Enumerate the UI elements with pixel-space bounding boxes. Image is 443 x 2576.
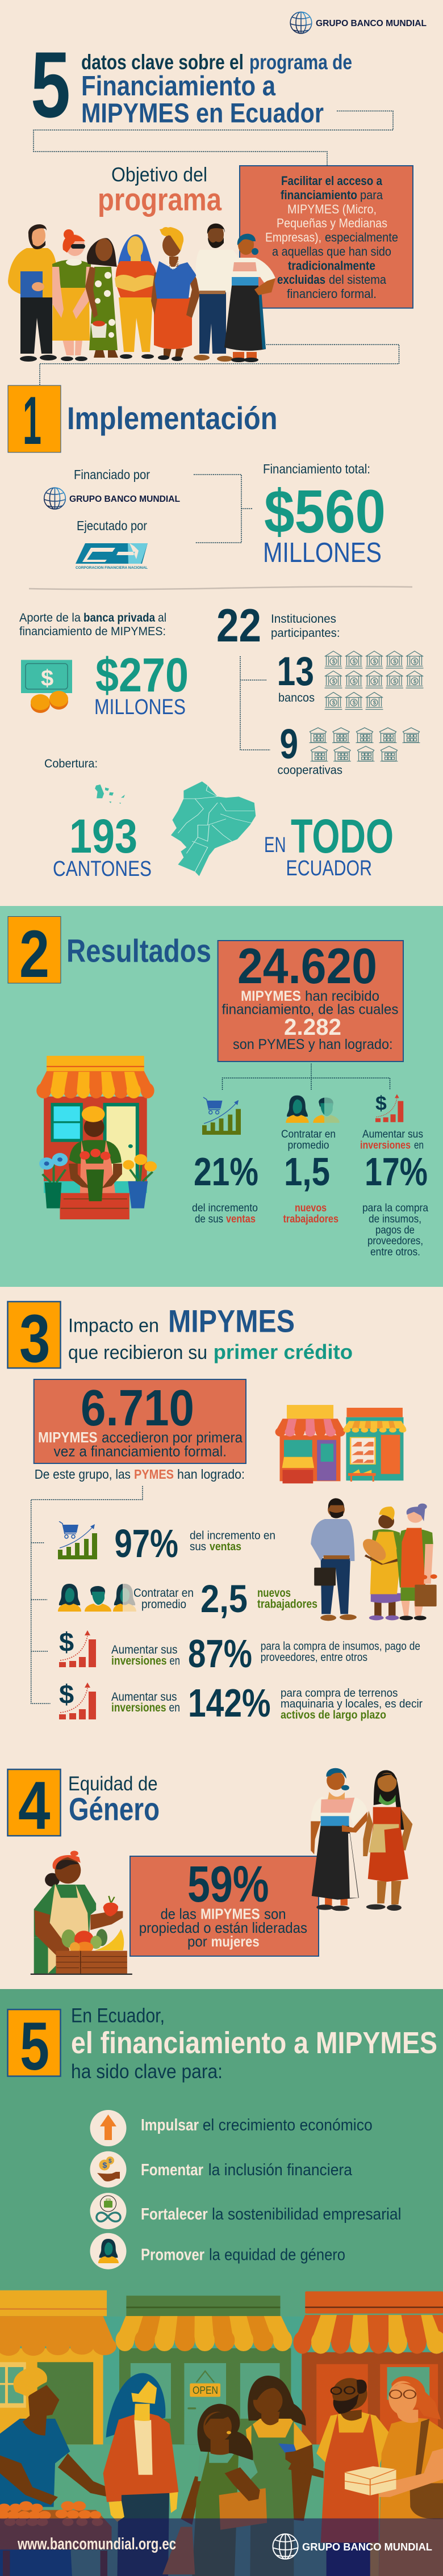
- callout: 24.620 mipymes: 2.282: [284, 1014, 341, 1040]
- stat: 13 bancos: bancos: [278, 691, 315, 704]
- panel: objetivo text box: tradicionalmente: [288, 258, 375, 272]
- heading: equidad de género: [68, 1773, 160, 1828]
- table of oranges: [0, 2501, 112, 2576]
- stat: financiamiento total: MILLONES: [263, 538, 382, 568]
- callout: 59 por ciento mujeres: 59%: [187, 1856, 269, 1913]
- person: woman blue dress: [0, 2367, 114, 2576]
- heading: impacto en mipymes: MIPYMES: [168, 1303, 295, 1339]
- item: promover: Promover: [141, 2246, 204, 2264]
- stat: 17 por ciento inversiones: inversiones: [360, 1140, 411, 1152]
- person: man apron: [288, 2378, 390, 2576]
- stat: 87 por ciento inversiones: proveedores, entre otros: [261, 1651, 367, 1664]
- item: impulsar: Impulsar: [141, 2116, 199, 2134]
- text: aporte banca privada: [19, 611, 166, 638]
- footer band: www.bancomundial.org.ec: [17, 2535, 176, 2553]
- callout: 6.710 mipymes: vez a financiamiento formal.: [53, 1443, 227, 1460]
- panel: objetivo text box: financiero formal.: [287, 287, 377, 301]
- stat: 2,5 nuevos trabajadores: 2,5: [200, 1577, 248, 1621]
- person 5: woman yellow turban: [151, 227, 202, 361]
- stat: 22 instituciones: Instituciones: [271, 612, 336, 626]
- stat: 193 cantones: 193: [69, 809, 137, 863]
- heading: resultados: Resultados: [66, 933, 211, 970]
- ejecutado por CFN: [76, 518, 148, 570]
- panel: objetivo text box: especialmente: [325, 230, 398, 245]
- illustration: group of seven people: [8, 224, 275, 362]
- heading: equidad de género: Equidad de: [68, 1773, 158, 1795]
- panel: objetivo text box: para: [360, 188, 383, 202]
- callout: 59 por ciento mujeres: por: [187, 1933, 207, 1950]
- stat: 142 por ciento inversiones: inversiones: [111, 1701, 166, 1714]
- stat: 142 por ciento inversiones: para compra de terrenos: [281, 1687, 398, 1700]
- section 3 number: 3: [19, 1300, 50, 1377]
- stat: 87 por ciento inversiones: inversiones: [111, 1655, 167, 1668]
- person 6: man white shirt: [194, 224, 239, 362]
- title: datos clave sobre el: [81, 51, 244, 74]
- heading: equidad de género: Género: [69, 1792, 160, 1828]
- panel: objetivo text box: MIPYMES (Micro,: [287, 202, 377, 216]
- illustration: three entrepreneurs: [311, 1498, 437, 1621]
- stat: 17 por ciento inversiones: Aumentar sus: [362, 1128, 423, 1140]
- item: fortalecer: [90, 2193, 401, 2229]
- person 2: woman red hair: [52, 229, 93, 361]
- panel: objetivo text box: financiamiento: [281, 188, 357, 202]
- title: programa de: [249, 51, 352, 74]
- stat: 142 por ciento inversiones: en: [169, 1701, 180, 1714]
- text: aporte banca privada: Aporte de la: [19, 611, 81, 624]
- illustration: market street with shops and people: [0, 2290, 443, 2576]
- stat: financiamiento total: [263, 462, 386, 568]
- stat: 87 por ciento inversiones: [59, 1627, 420, 1676]
- stat: 17 por ciento inversiones: de insumos,: [369, 1214, 421, 1225]
- panel: resultados: [0, 906, 443, 1287]
- stat: en todo Ecuador: EN: [264, 833, 286, 857]
- illustration: two women in traditional dress: [311, 1768, 412, 1911]
- stat: 21 por ciento ventas: [192, 1097, 258, 1225]
- stat: 2,5 nuevos trabajadores: [58, 1577, 317, 1621]
- stat: 17 por ciento inversiones: entre otros.: [370, 1247, 420, 1258]
- callout: 59 por ciento mujeres: mujeres: [211, 1933, 260, 1950]
- stat: en todo Ecuador: [264, 809, 394, 880]
- heading: objetivo del programa: programa: [98, 182, 222, 217]
- panel: objetivo text box: [240, 166, 413, 308]
- stat: 87 por ciento inversiones: Aumentar sus: [111, 1643, 177, 1656]
- callout: 59 por ciento mujeres: de las: [161, 1906, 197, 1923]
- section 1 number: 1: [23, 383, 41, 459]
- label: cobertura: Cobertura:: [44, 757, 98, 770]
- stat: 142 por ciento inversiones: activos de largo plazo: [281, 1709, 386, 1722]
- text: aporte banca privada: banca privada: [83, 611, 155, 624]
- person 4: woman blue hair: [115, 234, 157, 359]
- item: fomentar: $: [108, 2158, 112, 2164]
- callout: 6.710 mipymes: [34, 1379, 246, 1463]
- stat: en todo Ecuador: ECUADOR: [286, 857, 372, 880]
- heading: en Ecuador el financiamiento: [71, 2005, 437, 2083]
- stat: 17 por ciento inversiones: 17%: [365, 1149, 428, 1194]
- stat: 1,5 nuevos trabajadores: nuevos: [295, 1202, 327, 1214]
- stat: 2,5 nuevos trabajadores: trabajadores: [257, 1598, 317, 1611]
- panel: objetivo text box: Empresas),: [265, 230, 321, 245]
- item: fortalecer: Fortalecer: [141, 2205, 208, 2223]
- section 5 number: 5: [20, 2008, 49, 2084]
- shop: orange: [293, 2291, 443, 2444]
- illustration: florist at store: [36, 1056, 157, 1219]
- text: de este grupo: PYMES: [134, 1467, 174, 1482]
- stat: 21 por ciento ventas: ventas: [226, 1214, 256, 1225]
- stat: 270 millones: $270: [95, 648, 189, 702]
- stat: 193 cantones: [53, 809, 152, 881]
- callout: 6.710 mipymes: MIPYMES: [38, 1429, 98, 1446]
- text: de este grupo: [35, 1467, 245, 1482]
- stat: 17 por ciento inversiones: [360, 1092, 428, 1258]
- stat: 13 bancos: [277, 649, 424, 710]
- heading: impacto en mipymes: primer crédito: [214, 1340, 353, 1363]
- title: [31, 32, 352, 137]
- logo: Grupo Banco Mundial header: GRUPO BANCO MUNDIAL: [316, 19, 427, 28]
- stat: 9 cooperativas: [277, 720, 420, 777]
- item: promover: la equidad de género: [209, 2246, 345, 2264]
- stat: 270 millones: MILLONES: [94, 695, 186, 719]
- person 7: woman traditional dress: [223, 234, 275, 362]
- stat: 9 cooperativas: cooperativas: [277, 764, 342, 777]
- stat: 97 por ciento ventas: ventas: [210, 1541, 241, 1553]
- stat: 97 por ciento ventas: del incremento en: [190, 1530, 275, 1542]
- callout: 24.620 mipymes: son PYMES y han logrado:: [233, 1037, 393, 1052]
- callout: 24.620 mipymes: MIPYMES: [241, 988, 301, 1004]
- stat: 22 instituciones: [216, 599, 340, 652]
- stat: 1,5 nuevos trabajadores: [281, 1094, 340, 1225]
- callout: 24.620 mipymes: han recibido: [305, 988, 379, 1004]
- financiado por: Financiado por: [74, 467, 150, 482]
- callout: 59 por ciento mujeres: son: [264, 1906, 286, 1923]
- shop: yellow: [0, 2290, 116, 2444]
- text: aporte banca privada: al: [158, 611, 166, 624]
- item: fomentar: la inclusión financiera: [208, 2161, 353, 2179]
- text: aporte banca privada: financiamiento de MIPYMES:: [19, 625, 166, 638]
- stat: 1,5 nuevos trabajadores: Contratar en: [281, 1128, 336, 1140]
- panel: conclusión: [0, 1989, 443, 2576]
- stat: 2,5 nuevos trabajadores: Contratar en: [133, 1587, 194, 1600]
- text: de este grupo: han logrado:: [177, 1467, 245, 1482]
- panel: objetivo text box: excluidas: [277, 272, 325, 287]
- stat: 17 por ciento inversiones: para la compra: [362, 1202, 428, 1214]
- heading: impacto en mipymes: Impacto en: [68, 1315, 159, 1337]
- stat: 193 cantones: CANTONES: [53, 857, 152, 881]
- item: fomentar: $: [102, 2160, 107, 2170]
- item: fomentar: [90, 2151, 353, 2188]
- callout: 24.620 mipymes: financiamiento, de las cuales: [222, 1002, 399, 1018]
- callout: 6.710 mipymes: accedieron por primera: [102, 1429, 243, 1446]
- stat: en todo Ecuador: TODO: [291, 809, 394, 863]
- section 4 number: 4: [18, 1768, 51, 1844]
- item: impulsar: el crecimiento económico: [203, 2116, 373, 2134]
- title: 5: [31, 32, 70, 137]
- stat: 97 por ciento ventas: 97%: [115, 1521, 178, 1566]
- financiado por: [44, 467, 180, 509]
- heading: implementación: Implementación: [67, 400, 277, 436]
- stat: 97 por ciento ventas: [58, 1521, 275, 1566]
- stat: 21 por ciento ventas: 21%: [194, 1149, 258, 1194]
- stat: 22 instituciones: 22: [216, 599, 261, 652]
- callout: 24.620 mipymes: 24.620: [237, 938, 377, 994]
- stat: 142 por ciento inversiones: 142%: [188, 1681, 271, 1725]
- callout: 59 por ciento mujeres: MIPYMES: [200, 1906, 260, 1923]
- heading: impacto en mipymes: que recibieron su: [68, 1342, 207, 1363]
- stat: 17 por ciento inversiones: proveedores,: [367, 1235, 423, 1247]
- person: woman yellow dress: [345, 2376, 443, 2576]
- text: de este grupo: De este grupo, las: [35, 1467, 131, 1482]
- stat: 2,5 nuevos trabajadores: promedio: [141, 1598, 186, 1611]
- stat: 142 por ciento inversiones: [59, 1679, 423, 1725]
- item: impulsar: [90, 2110, 373, 2146]
- stat: 13 bancos: 13: [277, 649, 314, 694]
- stat: 1,5 nuevos trabajadores: promedio: [287, 1140, 329, 1152]
- callout: 59 por ciento mujeres: [130, 1856, 319, 1956]
- heading: objetivo del programa: Objetivo del: [111, 163, 207, 186]
- callout: 24.620 mipymes: [218, 938, 403, 1062]
- panel: objetivo text box: Facilitar el acceso a: [281, 174, 383, 188]
- icon: billete y monedas: [21, 660, 72, 713]
- sign: open: OPEN: [193, 2385, 218, 2396]
- ejecutado por CFN: Ejecutado por: [77, 518, 147, 533]
- stat: 270 millones: [94, 648, 189, 719]
- callout: 6.710 mipymes: 6.710: [81, 1380, 194, 1437]
- stat: 21 por ciento ventas: del incremento: [192, 1202, 258, 1214]
- map: Ecuador: [95, 782, 256, 876]
- title: Financiamiento a: [81, 71, 276, 102]
- person: woman apron yellow shirt: [246, 2376, 314, 2576]
- panel: objetivo text box: del sistema: [329, 272, 387, 287]
- heading: impacto en mipymes: [68, 1303, 353, 1363]
- stat: 142 por ciento inversiones: maquinaria y locales, es decir: [281, 1698, 423, 1710]
- logo: Grupo Banco Mundial header: [290, 12, 427, 33]
- stat: financiamiento total: $560: [264, 477, 386, 546]
- item: promover: [90, 2233, 345, 2269]
- title: MIPYMES en Ecuador: [81, 99, 324, 128]
- stat: 22 instituciones: participantes:: [271, 627, 340, 640]
- item: fortalecer: la sostenibilidad empresarial: [212, 2205, 401, 2223]
- heading: en Ecuador el financiamiento: ha sido clave para:: [71, 2061, 223, 2083]
- stat: 87 por ciento inversiones: 87%: [188, 1631, 252, 1676]
- ejecutado por CFN: CORPORACION FINANCIERA NACIONAL: [76, 566, 148, 570]
- footer band: GRUPO BANCO MUNDIAL: [302, 2541, 432, 2553]
- stat: 1,5 nuevos trabajadores: trabajadores: [283, 1214, 338, 1225]
- illustration: two shops: [275, 1405, 406, 1483]
- person 1: man yellow shirt: [8, 224, 57, 362]
- stat: 1,5 nuevos trabajadores: 1,5: [284, 1149, 330, 1194]
- heading: objetivo del programa: [98, 163, 222, 217]
- shop: green: [115, 2296, 292, 2444]
- stat: 17 por ciento inversiones: en: [414, 1140, 424, 1152]
- stat: 21 por ciento ventas: de sus: [195, 1214, 223, 1225]
- stat: 142 por ciento inversiones: Aumentar sus: [111, 1690, 177, 1704]
- footer band: [0, 2518, 443, 2576]
- section 2 number: 2: [19, 917, 49, 992]
- stat: 2,5 nuevos trabajadores: nuevos: [257, 1587, 291, 1600]
- illustration: woman with fruit crate: [31, 1851, 132, 1975]
- stat: financiamiento total: Financiamiento total:: [263, 462, 370, 476]
- stat: 97 por ciento ventas: sus: [190, 1541, 206, 1553]
- person: girl with bag: [162, 2404, 267, 2576]
- stat: 17 por ciento inversiones: pagos de: [375, 1224, 415, 1236]
- stat: 87 por ciento inversiones: en: [169, 1655, 180, 1668]
- icon: billete y monedas: $: [41, 666, 53, 691]
- heading: en Ecuador el financiamiento: En Ecuador,: [71, 2005, 165, 2027]
- financiado por: GRUPO BANCO MUNDIAL: [69, 494, 180, 504]
- panel: objetivo text box: Pequeñas y Medianas: [277, 216, 387, 230]
- person: woman red jacket: [103, 2373, 178, 2576]
- panel: objetivo text box: a aquellas que han sido: [272, 244, 391, 258]
- callout: 59 por ciento mujeres: propiedad o están lideradas: [139, 1919, 307, 1936]
- stat: 87 por ciento inversiones: para la compra de insumos, pago de: [261, 1641, 420, 1653]
- item: fomentar: Fomentar: [141, 2161, 203, 2179]
- person 3: woman green dress: [85, 238, 118, 358]
- stat: 9 cooperativas: 9: [279, 720, 298, 767]
